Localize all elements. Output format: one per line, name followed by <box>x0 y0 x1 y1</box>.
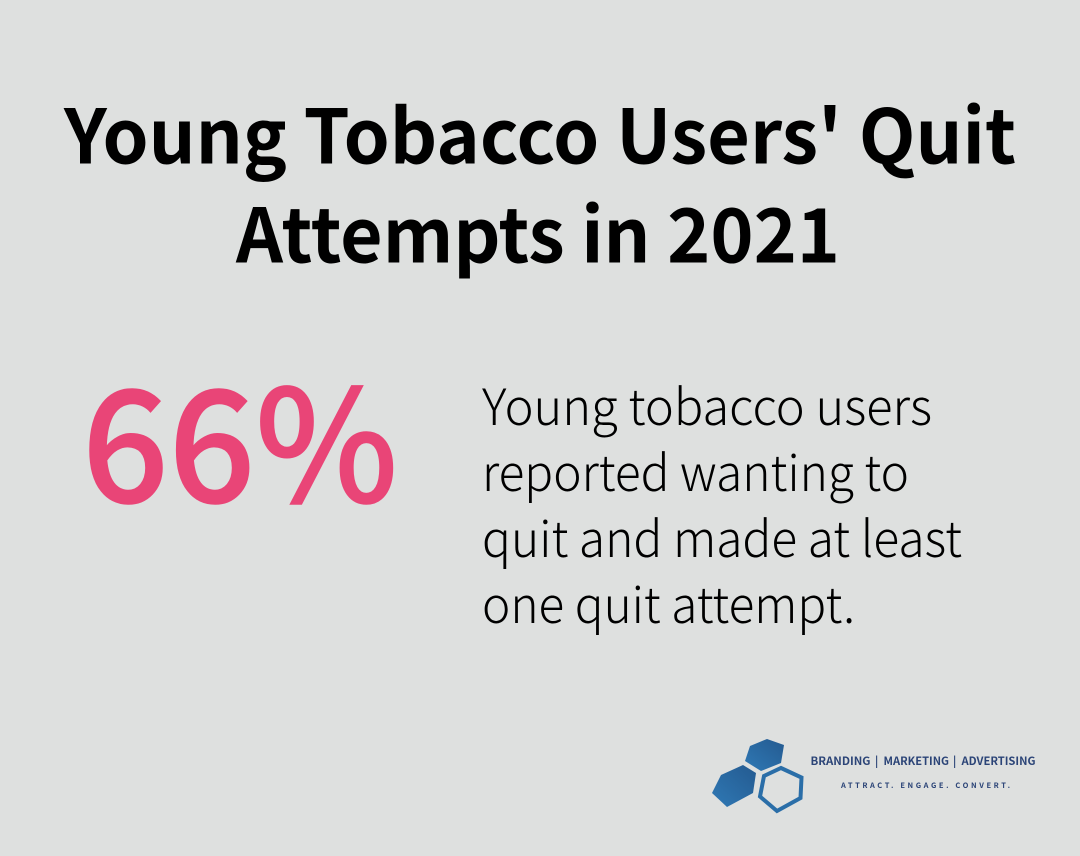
logo <box>712 739 1036 811</box>
logo tagline: ADVERTISING <box>960 753 1036 769</box>
title: Young Tobacco Users' Quit <box>63 76 1016 186</box>
description text: Young tobacco users <box>482 368 932 440</box>
title <box>63 76 1016 284</box>
logo tagline: | <box>953 753 956 769</box>
big statistic: 66%: 66% <box>82 322 398 547</box>
logo tagline: ATTRACT. ENGAGE. CONVERT. <box>840 780 1010 791</box>
description text: reported wanting to <box>482 434 909 506</box>
description text: quit and made at least <box>482 500 962 572</box>
logo tagline: MARKETING <box>884 753 949 769</box>
logo tagline: BRANDING <box>810 753 871 769</box>
icon: hexagons <box>712 739 802 811</box>
title: Attempts in 2021 <box>235 176 840 284</box>
description text <box>482 368 962 638</box>
logo tagline <box>810 753 1036 791</box>
description text: one quit attempt. <box>482 566 855 638</box>
logo tagline: | <box>875 753 878 769</box>
